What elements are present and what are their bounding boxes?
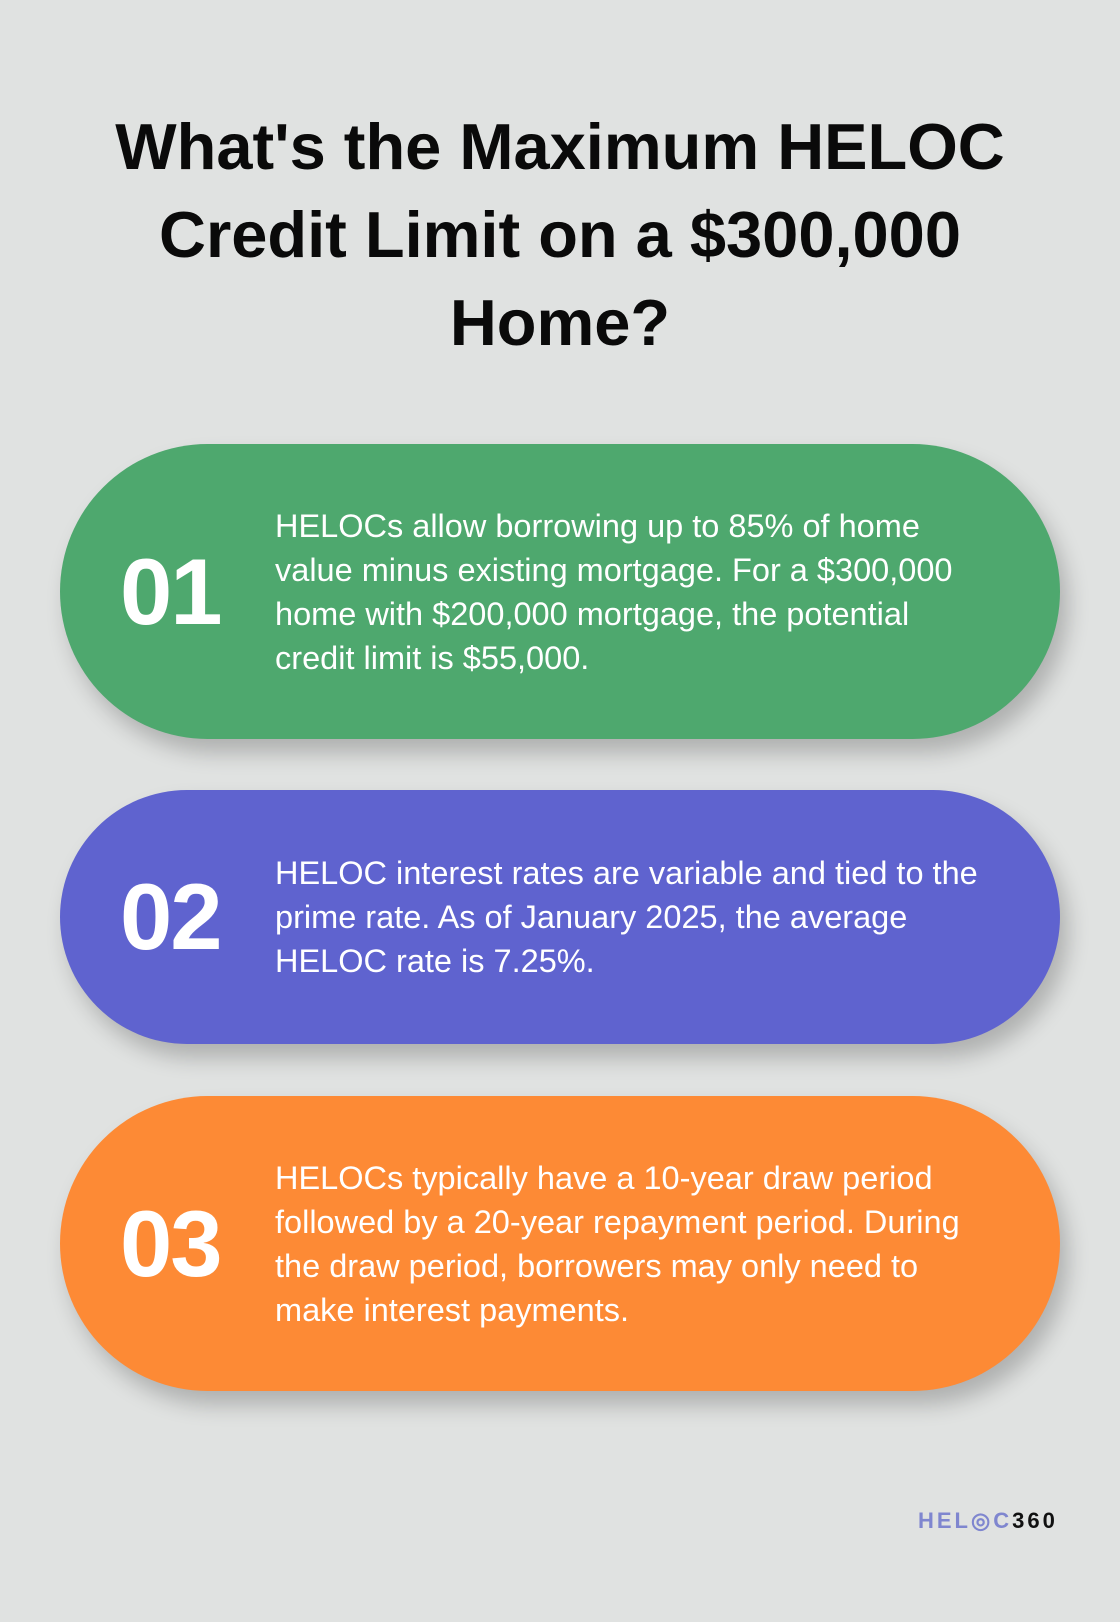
text 01: value minus existing mortgage. For a $300,000 bbox=[275, 552, 952, 588]
text 01: home with $200,000 mortgage, the potential bbox=[275, 596, 909, 632]
text 03: make interest payments. bbox=[275, 1292, 629, 1328]
logo: HEL◎C360 bbox=[918, 1508, 1058, 1533]
panel: 02 bbox=[60, 790, 1060, 1044]
text 01 bbox=[275, 508, 952, 676]
title: Home? bbox=[450, 286, 670, 359]
text 03: followed by a 20-year repayment period. During bbox=[275, 1204, 960, 1240]
text 02: HELOC interest rates are variable and tied to the bbox=[275, 855, 978, 891]
text 02: prime rate. As of January 2025, the average bbox=[275, 899, 907, 935]
text 03: HELOCs typically have a 10-year draw period bbox=[275, 1160, 933, 1196]
number 01: 01 bbox=[120, 538, 221, 644]
text 03 bbox=[275, 1160, 960, 1328]
text 02 bbox=[275, 855, 978, 979]
title: What's the Maximum HELOC bbox=[115, 110, 1005, 183]
panel: 03 bbox=[60, 1096, 1060, 1391]
title: Credit Limit on a $300,000 bbox=[159, 198, 961, 271]
title bbox=[115, 110, 1005, 359]
number 03: 03 bbox=[120, 1190, 221, 1296]
text 02: HELOC rate is 7.25%. bbox=[275, 943, 595, 979]
text 03: the draw period, borrowers may only need to bbox=[275, 1248, 918, 1284]
text 01: credit limit is $55,000. bbox=[275, 640, 589, 676]
panel: 01 bbox=[60, 444, 1060, 739]
number 02: 02 bbox=[120, 864, 221, 969]
text 01: HELOCs allow borrowing up to 85% of home bbox=[275, 508, 920, 544]
